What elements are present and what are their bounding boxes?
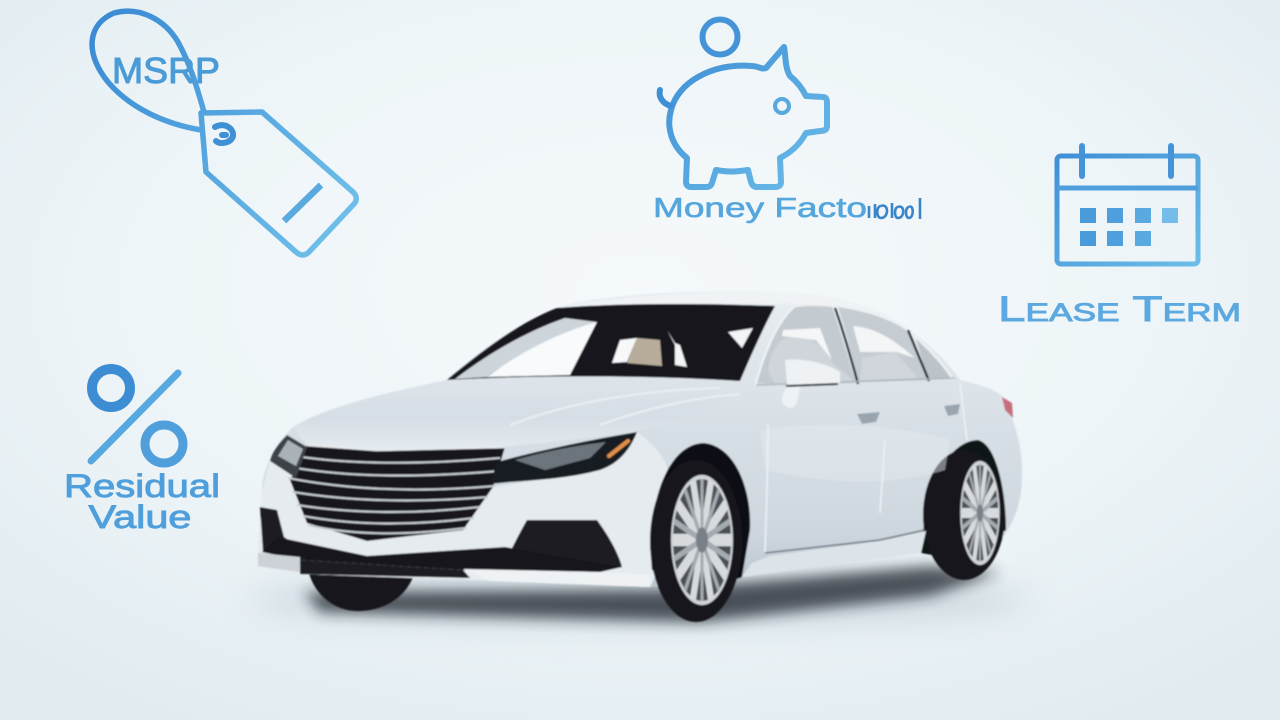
sill line: [765, 530, 925, 553]
side mirror: [782, 360, 840, 408]
left headlight detail: [278, 440, 303, 466]
rear tyre: [923, 450, 1005, 580]
front window seat and glare: [768, 335, 856, 385]
percent lower ring: [145, 425, 183, 463]
lower air intake: [505, 520, 622, 572]
right headlight: [490, 432, 637, 484]
amber indicator: [609, 441, 628, 456]
icon: percent residual value: [64, 369, 220, 535]
A pillar: [455, 318, 597, 379]
header line: [1057, 186, 1198, 190]
headlight detail: [515, 442, 606, 470]
car: [250, 291, 1030, 624]
ground shadow dark: [305, 566, 1000, 622]
grille top chrome: [307, 445, 505, 450]
date cells: [1080, 208, 1178, 246]
hood: [293, 378, 760, 450]
far front tyre: [308, 570, 414, 611]
pig tail: [660, 90, 671, 106]
grille slats: [288, 457, 510, 533]
front side window: [757, 306, 856, 385]
icon: piggy bank with coin: [653, 20, 920, 223]
label: MSRP: MSRP: [112, 50, 220, 91]
pig eye: [775, 99, 789, 113]
label: Residual Value: Residual: [64, 468, 220, 504]
front tyre: [650, 460, 742, 622]
window frame lines: [755, 305, 953, 386]
body shell: [258, 291, 1022, 587]
tail light: [1002, 397, 1013, 418]
windshield glints: [667, 328, 753, 367]
lower sill: [742, 531, 926, 577]
side panel shading: [760, 425, 950, 482]
door handles: [857, 412, 880, 424]
percent upper ring: [92, 369, 130, 407]
hood crease: [510, 388, 740, 425]
left headlight: [270, 435, 307, 478]
rear side window: [838, 307, 927, 382]
tag slash: [284, 185, 321, 221]
front grille: [290, 445, 505, 541]
interior seat: [627, 338, 662, 366]
ground shadow wide: [250, 576, 1030, 624]
front wheel arch: [651, 443, 750, 590]
windshield: [447, 304, 775, 381]
binder rings: [1082, 146, 1171, 176]
lower chrome lip: [258, 553, 300, 572]
rear window glare: [612, 338, 637, 363]
rear window seat and glare: [860, 352, 918, 381]
front bumper: [258, 432, 668, 587]
left fog intake: [260, 507, 300, 552]
garbled label end marks: [869, 198, 920, 219]
icon: calendar: [998, 146, 1241, 329]
icon: percent residual value: Value: [88, 499, 192, 535]
door seams: [765, 383, 967, 553]
label: Money Factor: Money Facto: [653, 192, 867, 223]
quarter window: [915, 335, 952, 380]
tag loop string: [92, 11, 204, 130]
rear arch: [921, 440, 1006, 560]
lower dark band: [262, 537, 622, 572]
coin: [702, 20, 738, 54]
percent slash: [91, 373, 178, 461]
label: Lease Term: Lease Term: [998, 290, 1241, 329]
icon: MSRP price tag: [92, 11, 356, 255]
pig body: [669, 47, 827, 187]
roof highlight: [557, 292, 895, 318]
windshield left reflection: [487, 322, 597, 377]
front rim: [672, 477, 732, 603]
rear rim: [961, 463, 999, 563]
tag hole: [215, 125, 233, 143]
calendar frame: [1057, 156, 1198, 264]
mirror underline: [786, 384, 838, 386]
belt line: [756, 378, 955, 385]
tag outline: [201, 112, 356, 255]
